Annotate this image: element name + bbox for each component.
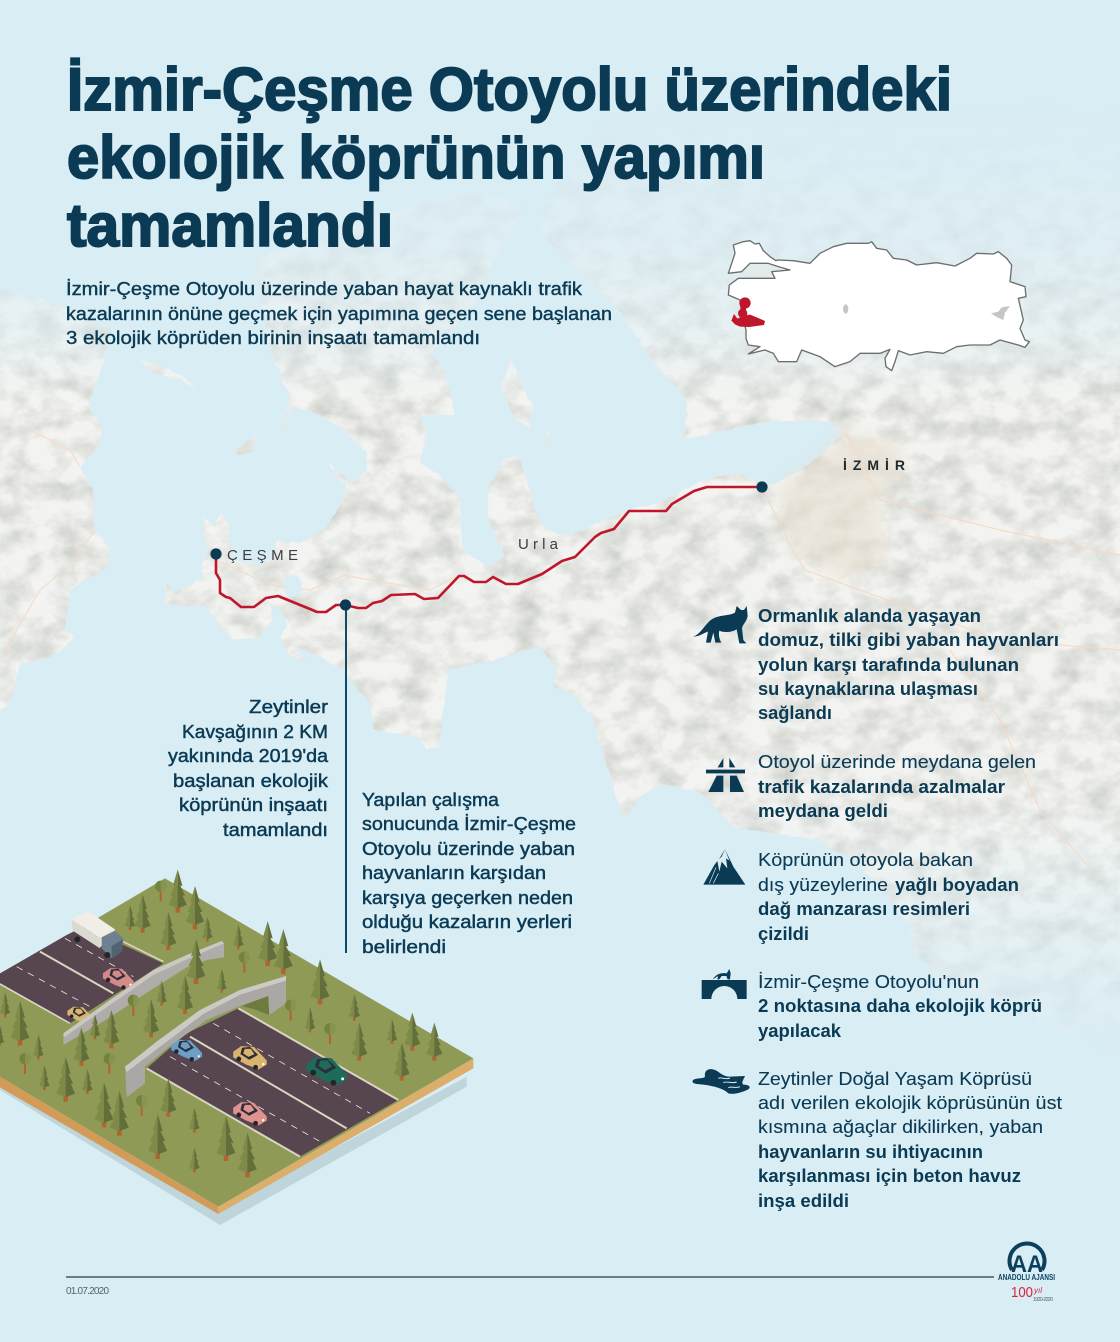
text: mountain paintings: dış yüzeylerine xyxy=(758,875,888,895)
text: mountain paintings: çizildi xyxy=(758,924,809,944)
rear road xyxy=(0,927,163,1023)
text: wildlife access: domuz, tilki gibi yaban hayvanları xyxy=(758,630,1059,650)
text: wildlife access xyxy=(758,606,1059,723)
text: fewer accidents: trafik kazalarında azalmalar xyxy=(758,777,1005,797)
text: two more bridges: İzmir-Çeşme Otoyolu'nun xyxy=(758,972,979,992)
text: mountain paintings: Köprünün otoyola bakan xyxy=(758,850,973,870)
ground shadow xyxy=(0,1073,467,1225)
map marker: bridge site xyxy=(340,599,351,611)
text: fewer accidents xyxy=(758,752,1036,821)
title: İzmir-Çeşme Otoyolu üzerindeki xyxy=(67,56,952,123)
intro text: 3 ekolojik köprüden birinin inşaatı tamamlandı xyxy=(66,328,480,348)
grass surface xyxy=(0,878,473,1207)
logo: Anadolu Ajansı: ANADOLU AJANSI xyxy=(998,1272,1055,1282)
text: wildlife access: yolun karşı tarafında bulunan xyxy=(758,655,1019,675)
rear bridge xyxy=(63,941,224,1045)
icon: fox xyxy=(693,606,748,643)
land: western island xyxy=(0,290,112,710)
callout: accident locations: belirlendi xyxy=(362,937,446,957)
text: water pool xyxy=(758,1069,1062,1211)
Turkey locator map xyxy=(728,241,1029,371)
map marker: İzmir xyxy=(756,481,768,493)
roads on land xyxy=(5,430,1120,880)
isometric illustration: ecological bridge over motorway xyxy=(0,869,473,1225)
logo: Anadolu Ajansı: AA xyxy=(1011,1251,1043,1278)
text: water pool: Zeytinler Doğal Yaşam Köprüsü xyxy=(758,1069,1032,1089)
callout: bridge location: başlanan ekolojik xyxy=(173,771,329,791)
car: pink rear xyxy=(103,968,134,990)
text: wildlife access: su kaynaklarına ulaşması xyxy=(758,679,978,699)
intro text xyxy=(66,279,612,348)
callout: bridge location xyxy=(168,697,329,840)
intro text: İzmir-Çeşme Otoyolu üzerinde yaban hayat kaynaklı trafik xyxy=(66,279,583,299)
pointer line to bridge site xyxy=(345,605,347,953)
icon: mountain xyxy=(703,849,745,885)
callout: accident locations: karşıya geçerken neden xyxy=(362,888,573,908)
title: ekolojik köprünün yapımı xyxy=(67,124,765,191)
callout: accident locations: hayvanların karşıdan xyxy=(362,863,546,883)
intro text: kazalarının önüne geçmek için yapımına geçen sene başlanan xyxy=(66,304,612,324)
text: two more bridges xyxy=(758,972,1042,1041)
logo: Anadolu Ajansı: 1920-2020 xyxy=(1033,1297,1053,1303)
car: blue xyxy=(171,1040,202,1061)
place label: Çeşme: ÇEŞME xyxy=(227,547,298,564)
callout: bridge location: Kavşağının 2 KM xyxy=(182,722,328,742)
text: wildlife access: Ormanlık alanda yaşayan xyxy=(758,606,981,626)
car: gold xyxy=(233,1046,267,1070)
text: water pool: inşa edildi xyxy=(758,1191,849,1211)
map marker: Çeşme xyxy=(210,548,222,560)
trees xyxy=(0,869,442,1177)
text: water pool: karşılanması için beton havuz xyxy=(758,1166,1021,1186)
text: fewer accidents: meydana geldi xyxy=(758,801,888,821)
text: mountain paintings xyxy=(758,850,1019,944)
icon: bridge with fox xyxy=(702,969,747,999)
land: mainland with Karaburun, Urla and Çeşme peninsulas xyxy=(164,222,1120,1002)
car: pink xyxy=(233,1102,267,1126)
callout: accident locations xyxy=(362,790,576,957)
map: land masses xyxy=(0,222,1120,1002)
land: small islands xyxy=(137,357,551,455)
callout: bridge location: Zeytinler xyxy=(249,697,328,717)
car: gold rear xyxy=(67,1007,93,1024)
text: water pool: adı verilen ekolojik köprüsünün üst xyxy=(758,1093,1062,1113)
text: water pool: kısmına ağaçlar dikilirken, yaban xyxy=(758,1117,1043,1137)
place label: Urla: Urla xyxy=(518,536,559,553)
logo: Anadolu Ajansı xyxy=(998,1243,1055,1303)
text: water pool: hayvanların su ihtiyacının xyxy=(758,1142,983,1162)
text: fewer accidents: Otoyol üzerinde meydana gelen xyxy=(758,752,1036,772)
date: 01.07.2020 xyxy=(66,1286,109,1297)
İzmir highlighted xyxy=(731,297,765,327)
callout: accident locations: Yapılan çalışma xyxy=(362,790,500,810)
urban area: İzmir xyxy=(776,432,905,580)
car: green pickup xyxy=(306,1057,347,1086)
text: two more bridges: yapılacak xyxy=(758,1021,842,1041)
title: tamamlandı xyxy=(67,192,393,259)
front road xyxy=(147,1008,398,1157)
text: mountain paintings: yağlı boyadan xyxy=(895,875,1019,895)
callout: accident locations: Otoyolu üzerinde yaban xyxy=(362,839,575,859)
Turkey outline xyxy=(728,241,1029,371)
shade under bridge xyxy=(242,996,269,1015)
callout: bridge location: yakınında 2019'da xyxy=(168,746,329,766)
callout: accident locations: olduğu kazaların yerleri xyxy=(362,912,572,932)
callout: bridge location: tamamlandı xyxy=(223,820,328,840)
icon: motorway xyxy=(706,758,745,792)
truck xyxy=(72,911,123,958)
icon: pond xyxy=(693,1069,750,1094)
logo: Anadolu Ajansı: 100 xyxy=(1011,1284,1033,1301)
route line İzmir–Çeşme xyxy=(216,487,762,612)
place label: İzmir: İZMİR xyxy=(843,457,905,473)
logo: Anadolu Ajansı: yıl xyxy=(1033,1286,1042,1295)
front bridge xyxy=(125,976,286,1097)
text: two more bridges: 2 noktasına daha ekolojik köprü xyxy=(758,996,1042,1016)
text: wildlife access: sağlandı xyxy=(758,703,832,723)
lakes xyxy=(843,304,1010,320)
text: mountain paintings: dağ manzarası resimleri xyxy=(758,899,970,919)
inner bay near Çeşme xyxy=(284,575,302,597)
soil left side xyxy=(0,1077,218,1214)
soil right side xyxy=(218,1058,473,1214)
title xyxy=(67,56,952,259)
callout: accident locations: sonucunda İzmir-Çeşme xyxy=(362,814,576,834)
callout: bridge location: köprünün inşaatı xyxy=(179,795,328,815)
